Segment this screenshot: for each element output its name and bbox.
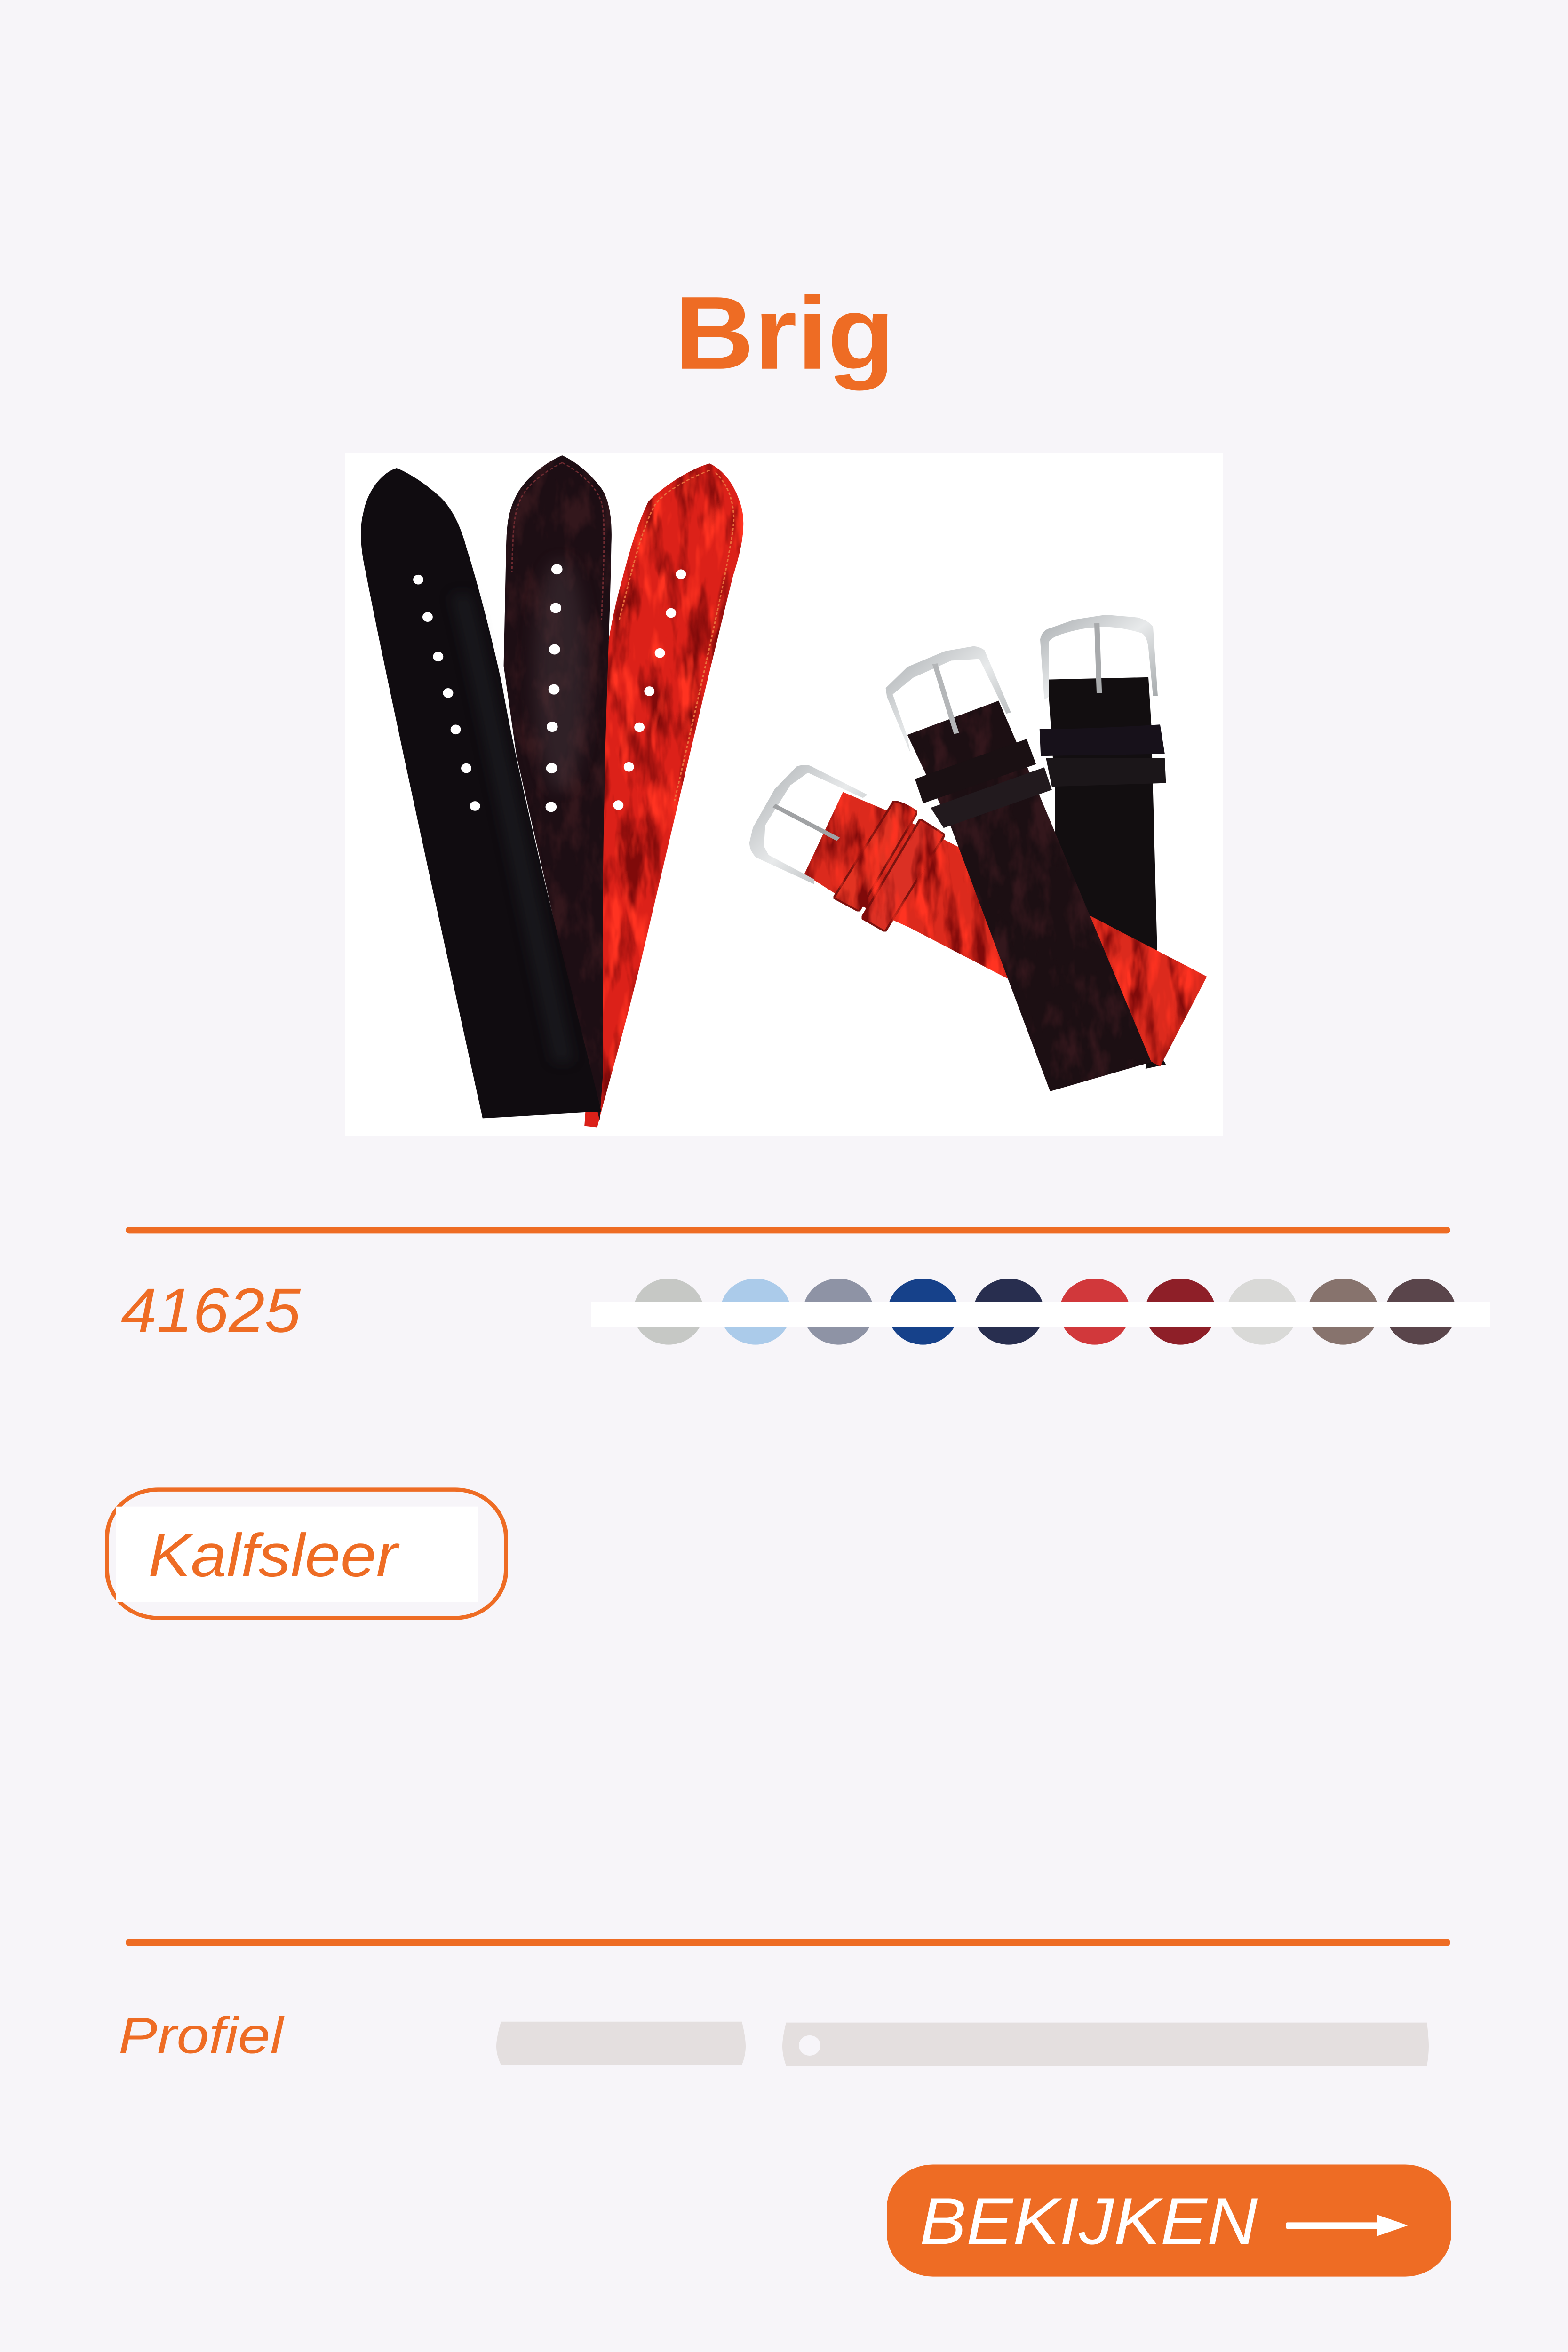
icon: arrow [1286, 2215, 1408, 2236]
product photo: watch straps [345, 453, 1223, 1136]
profile label: Profiel [119, 2007, 285, 2064]
material tag: Kalfsleer [148, 1522, 400, 1589]
divider line bottom [126, 1939, 1450, 1946]
button: bekijken: BEKIJKEN [920, 2184, 1258, 2258]
red long strap [584, 463, 743, 1128]
divider line top [126, 1227, 1450, 1233]
material tag [107, 1490, 506, 1618]
button: bekijken [887, 2165, 1451, 2277]
article number: 41625 [121, 1275, 301, 1345]
maroon long strap [504, 455, 612, 1120]
black long strap [361, 468, 601, 1118]
black buckled strap [1040, 615, 1166, 1069]
title: Brig [675, 276, 895, 391]
strap profile shapes [496, 2022, 1429, 2066]
colour swatches [591, 1279, 1490, 1345]
maroon buckled strap [886, 646, 1151, 1091]
red buckled strap [749, 765, 1207, 1066]
